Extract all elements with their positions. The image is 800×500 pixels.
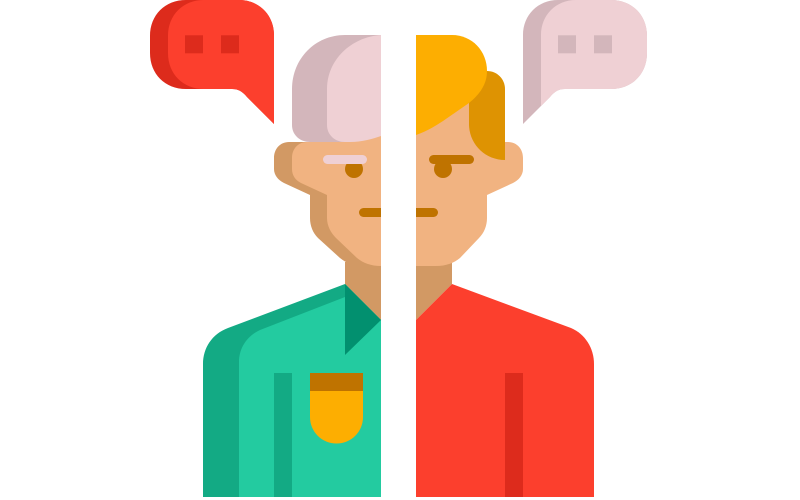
right eye and eyebrow — [429, 155, 474, 178]
right half of face — [416, 90, 523, 266]
mouth — [359, 208, 438, 217]
left shirt: green — [203, 284, 381, 497]
neck — [345, 262, 452, 320]
icon: pink speech bubble — [523, 0, 647, 124]
shirt stripe — [505, 373, 523, 497]
icon: red speech bubble — [150, 0, 274, 124]
left hair — [292, 35, 381, 142]
left eye and eyebrow — [323, 155, 367, 178]
shirt stripe — [274, 373, 292, 497]
shirt collar — [345, 284, 381, 355]
right shirt: red — [416, 284, 594, 497]
right hair — [416, 35, 505, 160]
left half of face — [274, 130, 381, 266]
shirt pocket — [310, 373, 363, 444]
